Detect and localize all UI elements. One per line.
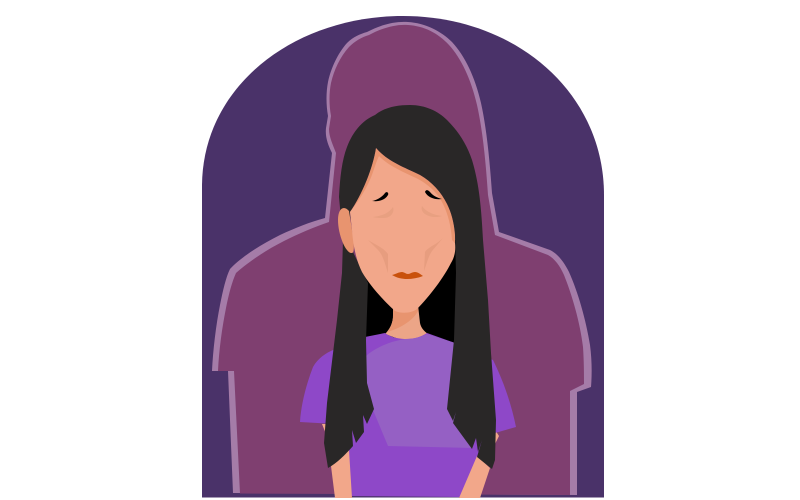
face [338, 148, 455, 313]
neck skin [385, 305, 428, 342]
silhouette outline [212, 22, 592, 495]
silhouette fill [218, 25, 584, 495]
panel: arch background [202, 16, 604, 498]
hair [324, 105, 496, 469]
t-shirt [300, 333, 516, 497]
black hair behind neck [360, 240, 458, 350]
shirt highlight [360, 334, 473, 448]
face shadow edge [350, 148, 455, 243]
lips [392, 272, 423, 279]
right eye [425, 190, 442, 199]
shirt base [300, 333, 516, 497]
left cheek line [368, 240, 388, 273]
woman's arms [331, 450, 490, 498]
ear [338, 208, 354, 253]
right cheek line [424, 238, 443, 271]
left under-eye crease [373, 207, 393, 218]
face skin [350, 156, 455, 313]
right under-eye crease [422, 206, 442, 217]
small skin glimpses under sleeves [322, 424, 499, 448]
shadow figure silhouette [212, 22, 592, 495]
left arm [331, 450, 352, 498]
left eye [372, 192, 388, 201]
neck shadow [387, 305, 418, 332]
neck [385, 305, 428, 342]
right arm [459, 456, 490, 498]
